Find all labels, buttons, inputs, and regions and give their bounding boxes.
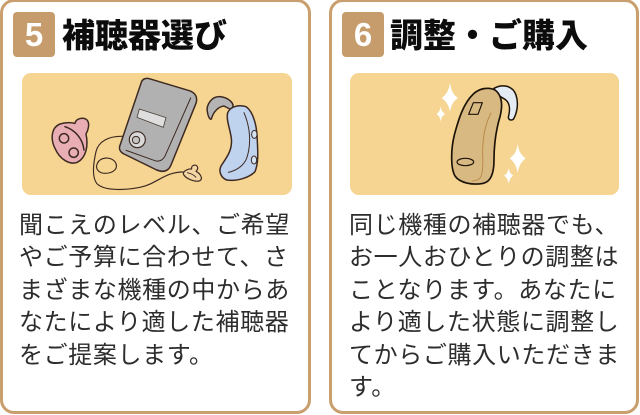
heading: step 5: 補聴器選び — [62, 17, 227, 54]
badge: number 5: 5 — [25, 16, 43, 53]
icon: sparkles — [436, 83, 526, 184]
heading: step 6: 調整・ご購入 — [390, 17, 588, 54]
text: step 5 description — [19, 212, 290, 369]
badge: number 6: 6 — [354, 16, 372, 53]
icon: pink ear mold — [52, 118, 89, 163]
icon: blue behind-the-ear aid — [207, 97, 258, 180]
text: step 6 description: 同じ機種の補聴器でも、 — [349, 212, 619, 239]
text: step 5 description: をご提案します。 — [19, 342, 214, 369]
text: step 5 description: まざまな機種の中からあ — [19, 277, 290, 304]
text: step 6 description: てからご購入いただきま — [349, 342, 620, 369]
text: step 6 description: ことなります。あなたに — [349, 277, 617, 304]
icon: ear hook — [494, 86, 517, 120]
text: step 5 description: 聞こえのレベル、ご希望 — [19, 212, 290, 239]
text: step 6 description: す。 — [349, 374, 396, 401]
text: step 6 description: より適した状態に調整し — [349, 309, 619, 336]
text: step 6 description: お一人おひとりの調整は — [349, 244, 619, 271]
icon: tan hearing aid body — [452, 88, 502, 184]
text: step 5 description: やご予算に合わせて、さ — [19, 244, 289, 271]
badge: number 5 — [13, 12, 55, 57]
icon: cord and small earpiece — [93, 136, 201, 189]
text: step 6 description — [349, 212, 620, 401]
panel: step 5 frame — [0, 0, 311, 414]
icon: gray pocket processor — [119, 78, 197, 171]
illustration background: step 6 — [350, 73, 619, 195]
illustration background: step 5 — [22, 73, 292, 195]
badge: number 6 — [342, 12, 384, 57]
text: step 5 description: なたにより適した補聴器 — [19, 309, 289, 336]
panel: step 6 frame — [329, 0, 639, 414]
